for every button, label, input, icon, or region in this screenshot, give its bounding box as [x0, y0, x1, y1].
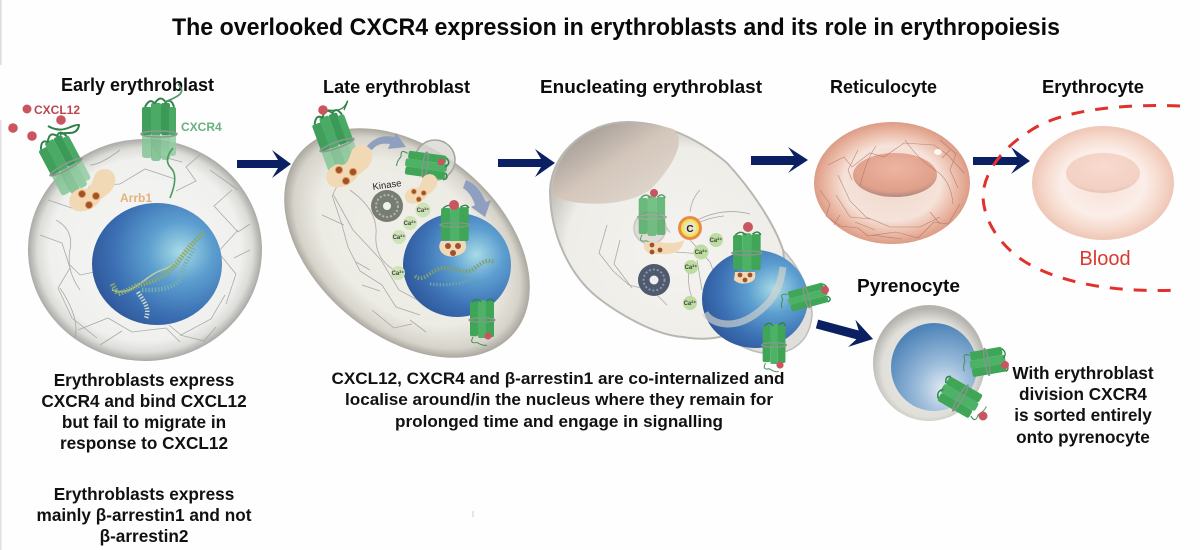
icon: nuclear ligand: [449, 200, 459, 210]
receptor: endosome: [395, 148, 450, 181]
receptor: lower: [934, 374, 991, 424]
receptor: nuclear: [732, 232, 762, 278]
Ca ions: Ca²⁺: [695, 249, 707, 256]
Ca ions: Ca²⁺: [393, 234, 405, 241]
DNA helix: [112, 232, 204, 318]
receptor: right pyrenocyte side: [778, 281, 831, 315]
cell cap: [552, 123, 679, 204]
Ca ions: Ca²⁺: [685, 264, 697, 271]
receptor: bottom: [762, 323, 786, 372]
receptor: lower nuclear: [469, 299, 495, 345]
icon: arrestin with phosphates: [69, 169, 115, 211]
icon: inner vesicle: [634, 212, 666, 244]
receptor: free CXCR4: [141, 84, 182, 198]
blood boundary dashed line: [983, 106, 1180, 290]
Ca ions: Ca²⁺: [684, 300, 696, 307]
highlight: [934, 149, 942, 155]
nucleus: [403, 213, 511, 317]
Ca ions: [391, 202, 430, 280]
icon: bottom ligand: [776, 361, 784, 369]
text block: pyrenocyte description: onto pyrenocyte: [1016, 427, 1150, 447]
receptor: membrane: [308, 105, 363, 177]
icon: centrosome: [678, 216, 702, 240]
cytoskeleton: [322, 170, 428, 332]
cell body: [28, 139, 262, 361]
label: Arrb1: Arrb1: [120, 191, 152, 205]
icon: ligand in endosome: [438, 158, 444, 166]
cell body: [1032, 126, 1174, 240]
DNA helix: [415, 261, 495, 285]
text block: arrestin note: β-arrestin2: [100, 526, 188, 546]
Ca ions: Ca²⁺: [710, 237, 722, 244]
icon: CXCL12 ligand dots: [8, 104, 66, 141]
arrow: early to late: [237, 150, 291, 178]
icon: right ligand: [821, 286, 829, 294]
text block: arrestin note: mainly β-arrestin1 and not: [37, 505, 252, 525]
icon: proteasome: [638, 264, 670, 296]
icon: lower ligand: [484, 332, 492, 340]
text block: pyrenocyte description: is sorted entirely: [1014, 405, 1152, 425]
icon: nuclear arrestin: [439, 241, 466, 257]
text block: co-internalization description: CXCL12, CXCR4 and β-arrestin1 are co-internalized and: [332, 369, 784, 388]
Ca ions: Ca²⁺: [404, 220, 416, 227]
cell body: [873, 305, 985, 421]
heading: erythrocyte: Erythrocyte: [1042, 77, 1144, 97]
arrow: enucleating to reticulocyte: [751, 147, 808, 173]
arrow: late to enucleating: [498, 149, 555, 177]
Ca ions: Ca²⁺: [417, 207, 429, 214]
text block: early erythroblast description: Erythroblasts express: [54, 370, 234, 390]
icon: lower ligand: [978, 412, 988, 420]
text block: co-internalization description: [332, 369, 784, 431]
heading: late erythroblast: Late erythroblast: [323, 77, 470, 97]
text block: arrestin note: Erythroblasts express: [54, 484, 234, 504]
cell body: [550, 122, 784, 339]
cytoskeleton: [599, 190, 750, 305]
panel: reticulocyte: [814, 77, 970, 244]
cytoskeleton: [40, 140, 250, 345]
icon: ligand on membrane receptor: [318, 101, 348, 115]
icon: centrosome: C: [686, 224, 694, 235]
receptor: bound CXCR4 with CXCL12: [33, 125, 95, 199]
icon: upper ligand: [1001, 361, 1009, 369]
nucleus lobe: [702, 250, 808, 348]
icon: kinase proteasome: [371, 190, 403, 222]
Ca ions: [683, 233, 723, 310]
icon: endosome vesicle: [415, 140, 455, 180]
text block: early erythroblast description: response to CXCL12: [60, 433, 228, 453]
icon: arrestin inner: [644, 240, 684, 254]
label: blood: Blood: [1079, 248, 1131, 270]
panel: enucleating erythroblast: [540, 77, 831, 372]
cell body: [240, 82, 574, 404]
reticulum network: [820, 140, 964, 239]
dimple: [1066, 153, 1140, 193]
label: Kinase: Kinase: [372, 178, 402, 193]
nucleus: [92, 203, 222, 325]
text block: pyrenocyte description: With erythroblast: [1012, 363, 1154, 383]
text block: early erythroblast description: CXCR4 and bind CXCL12: [41, 391, 247, 411]
arrow: reticulocyte to erythrocyte: [973, 147, 1030, 174]
icon: ligand inner: [650, 189, 658, 197]
panel: late erythroblast: [240, 77, 574, 404]
icon: endocytosis arrow 1: [366, 133, 406, 150]
label: CXCL12: CXCL12: [34, 103, 80, 117]
panel: early erythroblast: [8, 75, 262, 361]
icon: nuclear arrestin: [734, 272, 755, 284]
icon: arrestin: [326, 145, 372, 187]
nucleus: [891, 323, 977, 411]
icon: endocytosis arrow 2: [463, 180, 491, 217]
label: CXCR4: CXCR4: [181, 120, 222, 134]
text block: co-internalization description: localise around/in the nucleus where they remain for: [345, 390, 773, 409]
text block: pyrenocyte description: [1012, 363, 1154, 447]
title: The overlooked CXCR4 expression in erythroblasts and its role in erythropoiesis: [172, 14, 1060, 41]
heading: reticulocyte: Reticulocyte: [830, 77, 937, 97]
budding lobe: [722, 250, 812, 354]
heading: pyrenocyte: Pyrenocyte: [857, 276, 960, 296]
arrow: enucleating to pyrenocyte: [813, 310, 877, 353]
text block: co-internalization description: prolonged time and engage in signalling: [395, 412, 723, 431]
cell body: [814, 122, 970, 244]
heading: early erythroblast: Early erythroblast: [61, 75, 214, 95]
text block: early erythroblast description: [41, 370, 247, 453]
panel: pyrenocyte: [857, 276, 1009, 424]
dimple: [853, 153, 937, 197]
icon: arrestin small: [405, 174, 437, 204]
panel: erythrocyte: [1032, 77, 1174, 270]
Ca ions: Ca²⁺: [392, 270, 404, 277]
budding membrane band: [705, 267, 783, 324]
receptor: inner: [638, 195, 666, 244]
heading: enucleating erythroblast: Enucleating erythroblast: [540, 77, 762, 97]
text block: pyrenocyte description: division CXCR4: [1019, 384, 1147, 404]
text block: arrestin note: [37, 484, 252, 546]
text block: early erythroblast description: but fail to migrate in: [62, 412, 226, 432]
receptor: nuclear: [440, 205, 470, 249]
receptor: upper: [961, 345, 1009, 380]
icon: ligand nuclear: [743, 222, 753, 232]
